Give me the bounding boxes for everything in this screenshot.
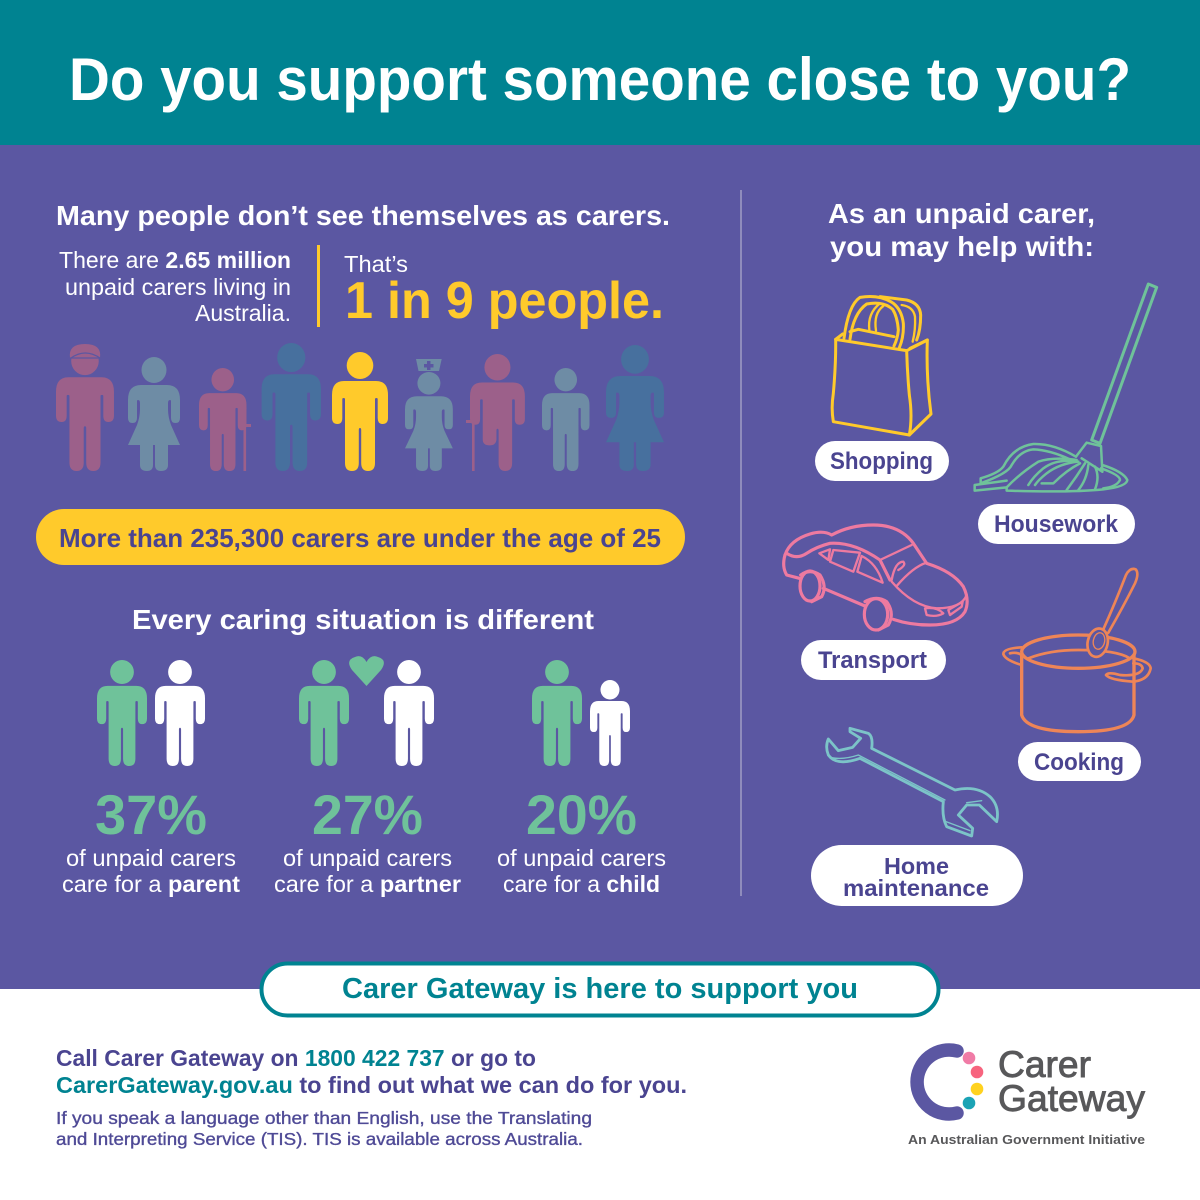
stat: partner [274,656,461,897]
icon: shopping bag [832,296,931,435]
icon: man with cane and short leg [466,354,525,471]
purple background panel [0,145,1200,989]
yellow pill: under 25: More than 235,300 carers are under the age of 25 [59,523,661,553]
logo: Carer Gateway [908,1044,1146,1147]
logo: Carer Gateway: Gateway [998,1078,1146,1119]
heading: as an unpaid carer: As an unpaid carer, [828,198,1095,229]
label: housework: Housework [994,511,1119,538]
icon: nurse [405,359,453,471]
text: 2.65 million carers: Australia. [195,300,291,326]
text: 2.65 million carers: There are 2.65 million [59,247,291,273]
label: home maintenance [811,845,1023,906]
row of nine people icons [56,343,664,471]
stat: parent [62,660,240,897]
label: transport [801,640,946,680]
label: housework [978,504,1135,544]
heading: every caring situation: Every caring situation is different [132,604,594,635]
callout: 1 in 9 people: That’s [344,251,408,277]
stat: partner: of unpaid carers [283,845,452,871]
label: shopping [815,441,949,481]
icon: boy [542,368,589,471]
icon: tall man [262,343,321,471]
stat: partner: 27% [312,783,423,846]
title banner [0,0,1200,145]
stat: child: of unpaid carers [497,845,666,871]
icon: car [784,525,967,630]
stat: child: care for a child [503,871,660,897]
icon: cooking pot [1003,569,1151,732]
heading: many people: Many people don’t see themselves as carers. [56,200,670,231]
contact text: CarerGateway.gov.au to find out what we can do for you. [56,1072,687,1098]
contact text [56,1045,687,1098]
icon: wrench [827,728,997,836]
icon: older man with cane [199,368,251,471]
label: transport: Transport [818,647,927,674]
text: 2.65 million carers [59,247,291,326]
translating service note [56,1108,592,1149]
title banner: Do you support someone close to you? [69,46,1131,113]
label: home maintenance: Home [884,853,949,879]
yellow pill: under 25 [36,509,685,565]
heading: as an unpaid carer: you may help with: [830,231,1094,262]
icon: yellow highlighted person [332,352,388,471]
logo: Carer Gateway: An Australian Government Initiative [908,1133,1145,1147]
stat: child: 20% [526,783,637,846]
white footer panel [0,989,1200,1200]
translating service note: If you speak a language other than English, use the Translating [56,1108,592,1128]
stat: child [497,660,666,897]
label: shopping: Shopping [830,448,933,475]
icon: woman one [128,357,180,471]
stat: parent: of unpaid carers [66,845,236,871]
stat: parent: care for a parent [62,871,240,897]
heading: as an unpaid carer [828,198,1095,262]
stat: parent: 37% [95,783,207,846]
callout: 1 in 9 people: 1 in 9 people. [345,272,664,330]
label: home maintenance: maintenance [843,875,989,901]
contact text: Call Carer Gateway on 1800 422 737 or go to [56,1045,536,1071]
icon: tall woman [606,345,664,471]
logo: Carer Gateway: Carer [998,1044,1091,1085]
label: cooking: Cooking [1034,749,1124,776]
stat: partner: care for a partner [274,871,461,897]
label: cooking [1018,742,1141,781]
banner pill: here to support you [262,964,938,1016]
translating service note: and Interpreting Service (TIS). TIS is available across Australia. [56,1129,583,1149]
text: 2.65 million carers: unpaid carers living in [65,274,291,300]
icon: driver [56,344,114,471]
icon: mop [975,284,1157,491]
banner pill: here to support you: Carer Gateway is here to support you [342,973,858,1005]
